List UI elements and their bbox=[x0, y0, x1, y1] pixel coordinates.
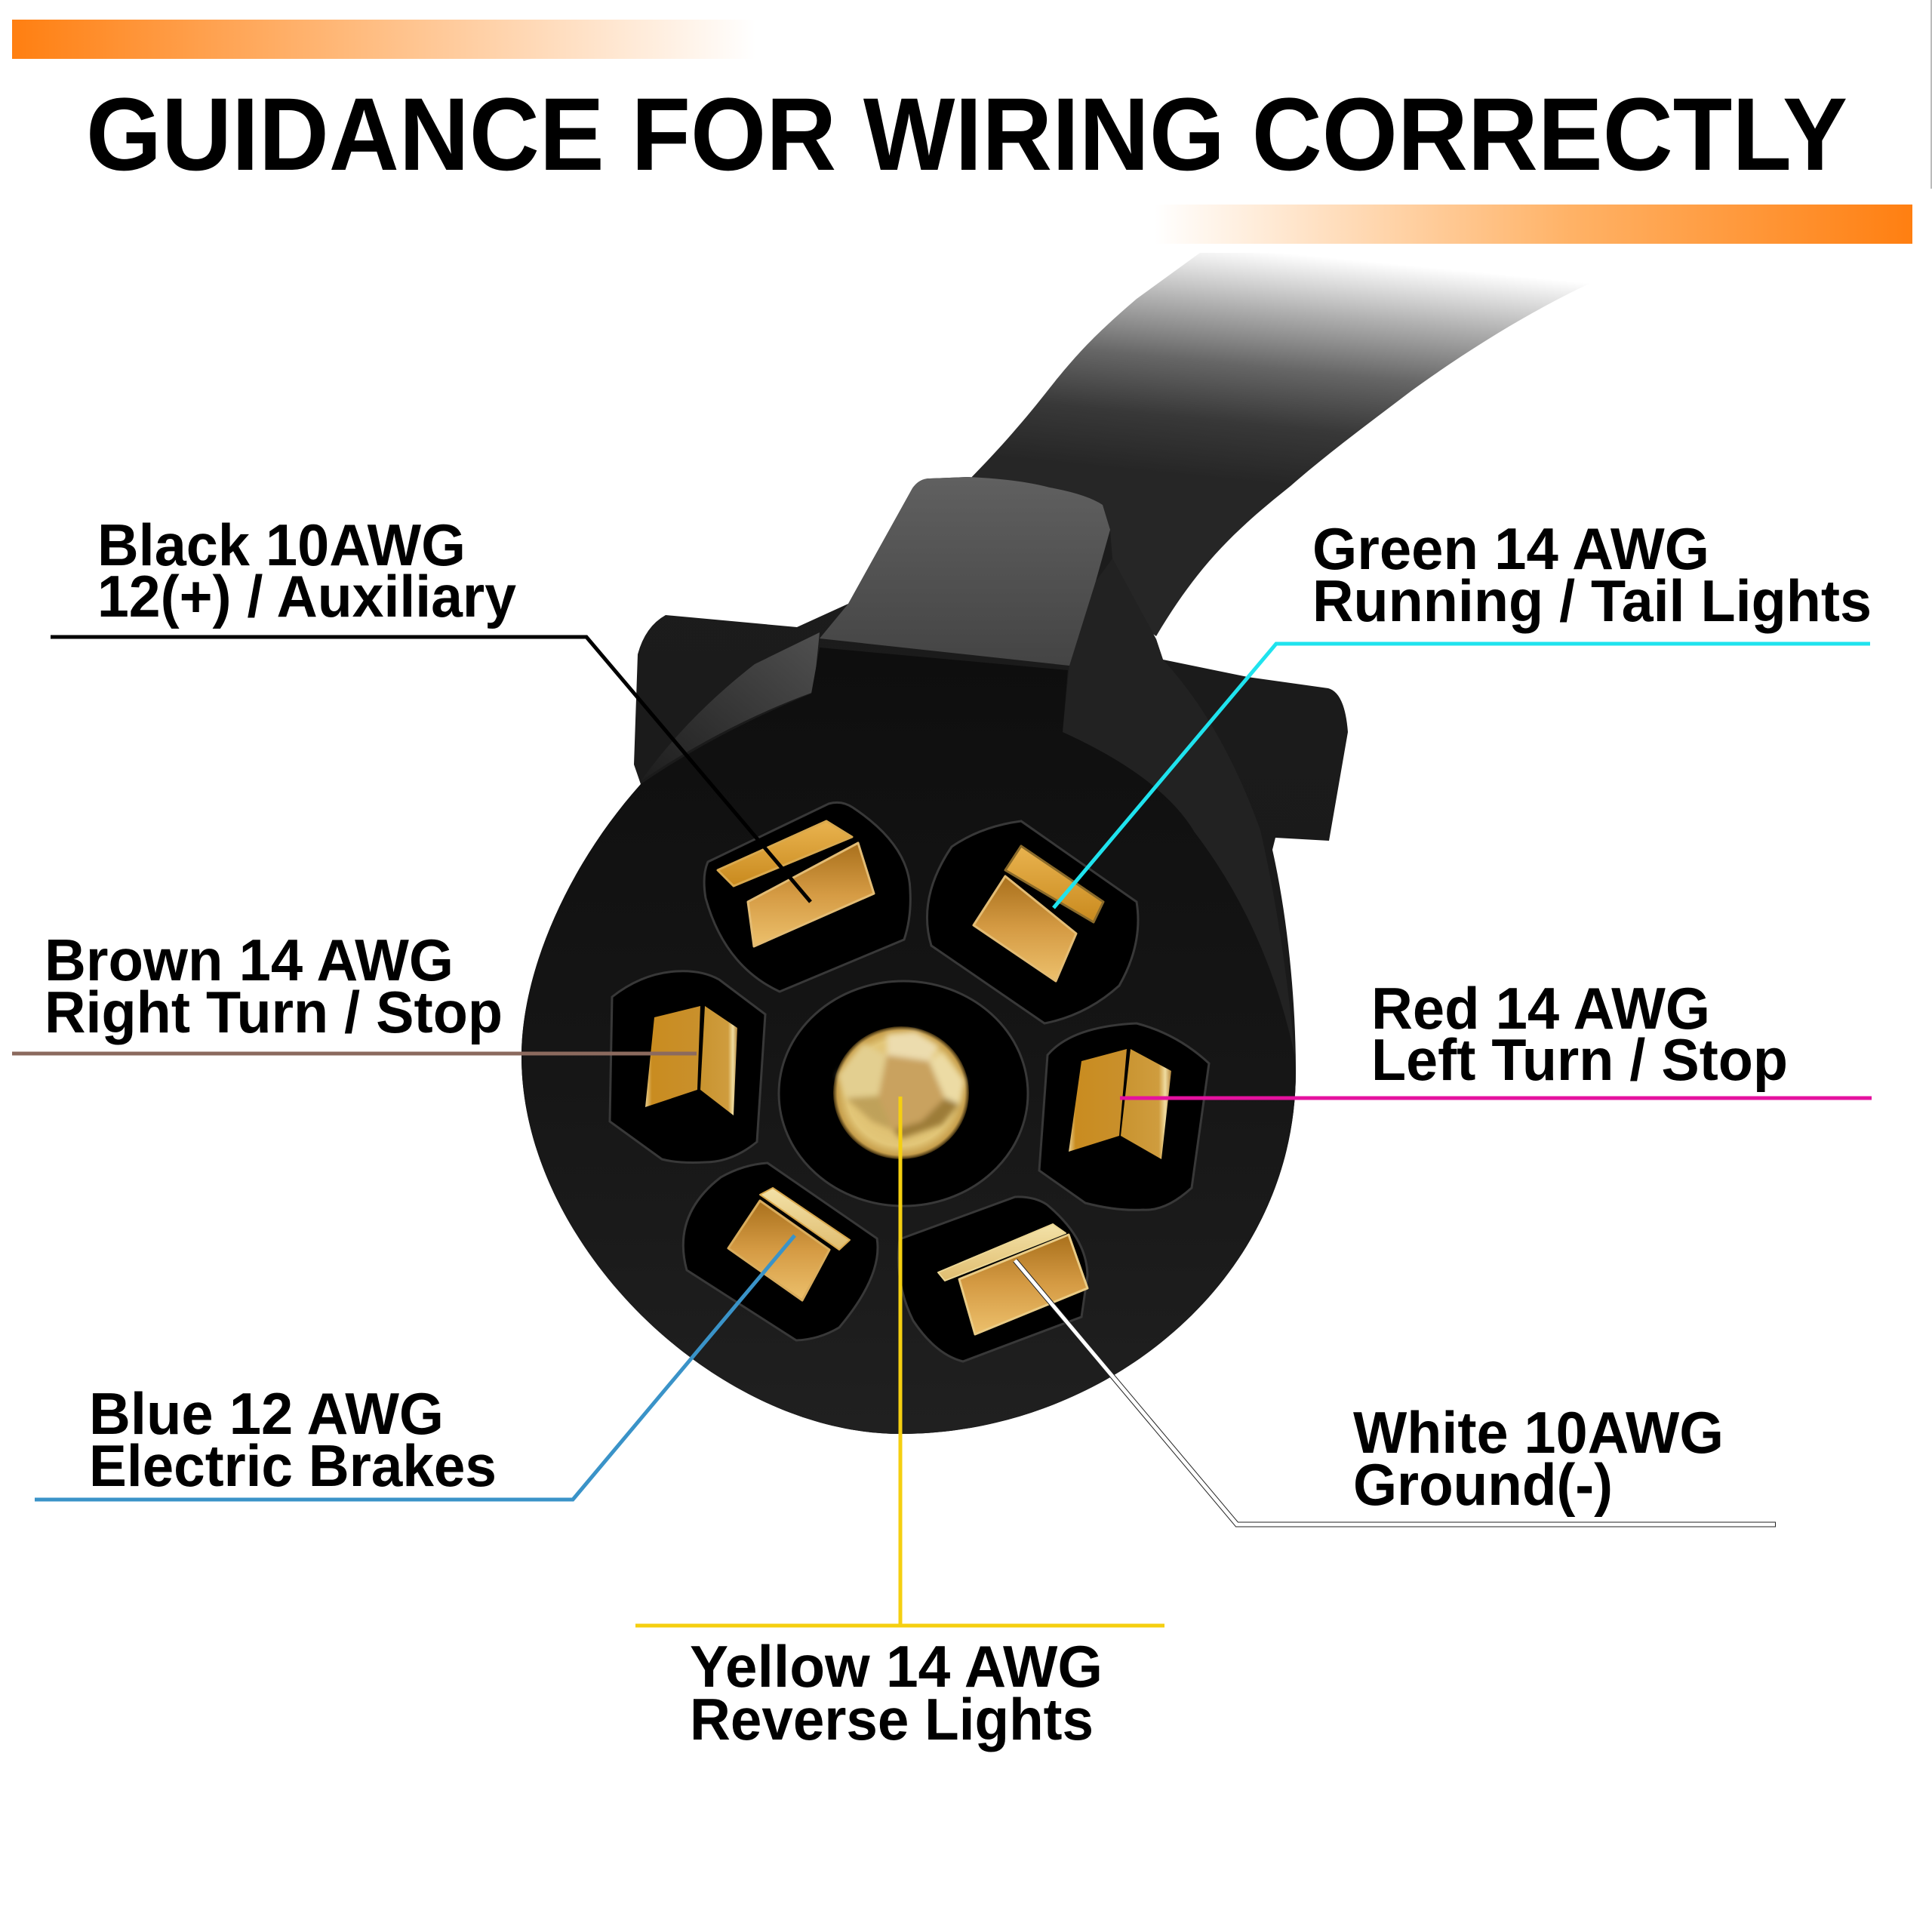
leader line: red bbox=[1120, 1096, 1872, 1100]
label: green wire: Green 14 AWG bbox=[1312, 515, 1709, 582]
pin: bottom left bbox=[728, 1188, 850, 1300]
centre pin bbox=[833, 1026, 969, 1159]
label: blue wire: Electric Brakes bbox=[89, 1432, 497, 1499]
label: red wire: Left Turn / Stop bbox=[1371, 1026, 1788, 1093]
connector plug bbox=[521, 477, 1348, 1434]
key ridge bbox=[820, 477, 1110, 666]
cable bbox=[958, 253, 1623, 636]
right edge hairline bbox=[1930, 0, 1932, 189]
connector body bbox=[521, 477, 1348, 1434]
leader line: black bbox=[51, 637, 811, 902]
connector face bbox=[521, 648, 1296, 1434]
pin: left bbox=[645, 1006, 737, 1115]
pin: right bbox=[1069, 1049, 1171, 1159]
top orange bar bbox=[12, 20, 755, 59]
label: red wire: Red 14 AWG bbox=[1371, 975, 1710, 1041]
bottom orange bar bbox=[1155, 205, 1912, 244]
socket: top right bbox=[927, 821, 1138, 1023]
label: brown wire bbox=[45, 927, 503, 1045]
leader line: brown bbox=[12, 1052, 697, 1055]
label: yellow wire bbox=[690, 1633, 1103, 1752]
label: green wire bbox=[1312, 515, 1872, 634]
label: black wire: 12(+) / Auxiliary bbox=[97, 563, 516, 629]
pin: top right bbox=[974, 846, 1103, 981]
label: yellow wire: Reverse Lights bbox=[690, 1686, 1094, 1752]
label: white wire: Ground(-) bbox=[1353, 1451, 1613, 1518]
socket: right bbox=[1039, 1023, 1209, 1210]
socket: top left bbox=[704, 802, 910, 992]
centre socket bbox=[779, 981, 1028, 1206]
label: green wire: Running / Tail Lights bbox=[1312, 568, 1872, 634]
leader line: green bbox=[1054, 644, 1870, 908]
label: blue wire: Blue 12 AWG bbox=[89, 1380, 444, 1447]
label: white wire: White 10AWG bbox=[1353, 1399, 1724, 1466]
label: yellow wire: Yellow 14 AWG bbox=[690, 1633, 1103, 1700]
label: black wire bbox=[97, 512, 516, 629]
label: blue wire bbox=[89, 1380, 497, 1499]
pin: bottom right bbox=[938, 1224, 1088, 1334]
pin: top left bbox=[718, 821, 874, 946]
label: brown wire: Right Turn / Stop bbox=[45, 979, 503, 1045]
right shoulder bbox=[1063, 558, 1295, 1057]
leader line: yellow bbox=[635, 1097, 1164, 1626]
label: black wire: Black 10AWG bbox=[97, 512, 466, 578]
label: red wire bbox=[1371, 975, 1788, 1093]
socket: left bbox=[610, 971, 765, 1162]
leader line: white bbox=[1015, 1260, 1776, 1524]
socket: bottom right bbox=[898, 1197, 1088, 1361]
label: white wire bbox=[1353, 1399, 1724, 1518]
title: GUIDANCE FOR WIRING CORRECTLY bbox=[86, 77, 1847, 192]
left rim highlight bbox=[641, 632, 820, 781]
socket: bottom left bbox=[683, 1163, 878, 1340]
leader line: blue bbox=[35, 1235, 795, 1500]
label: brown wire: Brown 14 AWG bbox=[45, 927, 454, 993]
